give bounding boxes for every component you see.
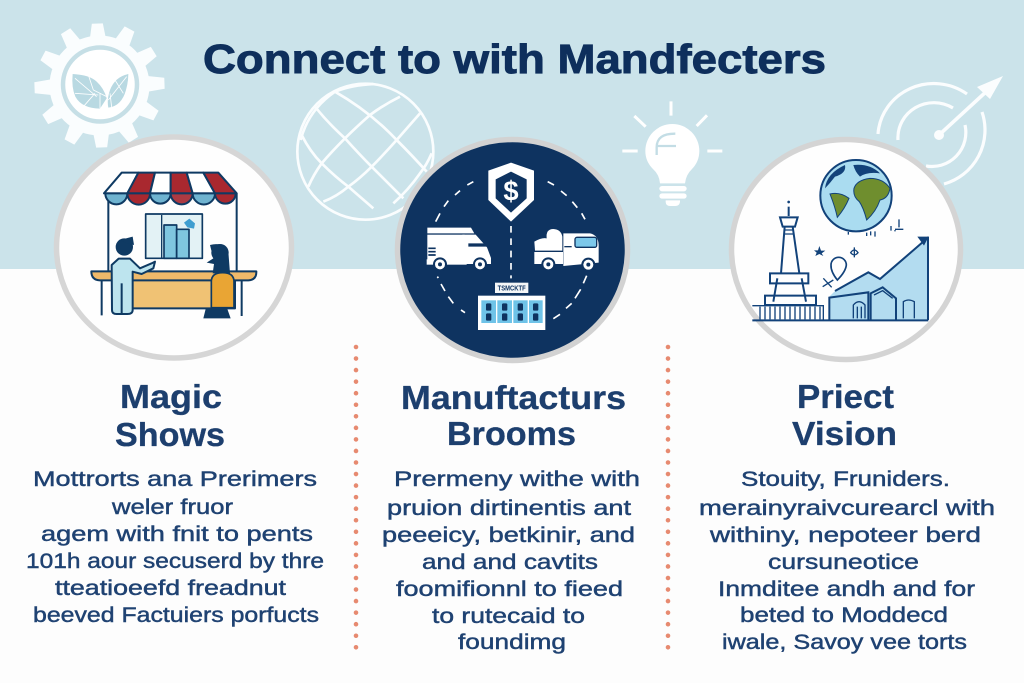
body text: Magic Shows: weler fruor: [111, 496, 233, 519]
icon: target with arrow: [878, 76, 1003, 184]
heading: Priect Vision: Priect: [797, 378, 894, 415]
icon: market stall: [91, 173, 256, 318]
body text: Manuftacturs Brooms: pruion dirtinentis ant: [387, 497, 631, 520]
panel: market stall circle: [56, 137, 292, 358]
panel: logistics circle: [398, 140, 628, 360]
icon: wire globe: [297, 84, 433, 220]
body text: Priect Vision: Inmditee andh and for: [718, 578, 975, 601]
text block: Manuftacturs Brooms: [382, 379, 640, 654]
body text: Priect Vision: merainyraivcurearcl with: [699, 497, 995, 520]
body text: Magic Shows: Mottrorts ana Prerimers: [33, 468, 317, 491]
icon: truck: [534, 229, 599, 272]
heading: Magic Shows: Magic: [120, 378, 222, 415]
body text: Manuftacturs Brooms: foomifionnl to fieed: [396, 578, 623, 601]
icon: tower: [752, 201, 823, 320]
panel: vision circle: [732, 140, 960, 360]
heading: Manuftacturs Brooms: Manuftacturs: [401, 379, 626, 416]
chart: growth area: [752, 237, 929, 320]
icon: gear with leaf: [34, 23, 165, 148]
heading: Manuftacturs Brooms: [401, 379, 626, 452]
divider: left dotted line: [354, 347, 358, 650]
icon: city growth and globe: [752, 160, 929, 320]
body text: Magic Shows: beeved Factuiers porfucts: [33, 604, 319, 627]
icon: logistics network: $: [503, 176, 519, 207]
title: Connect to with Mandfecters: [203, 36, 826, 82]
body text: Manuftacturs Brooms: to rutecaid to: [432, 605, 585, 628]
body text: Priect Vision: cursuneotice: [768, 551, 919, 574]
body text: Magic Shows: tteatioeefd freadnut: [55, 577, 286, 600]
heading: Magic Shows: [115, 378, 225, 453]
body text: Magic Shows: agem with fnit to pents: [41, 523, 313, 546]
top background band: [0, 0, 1024, 269]
body text: Priect Vision: withiny, nepoteer berd: [709, 524, 981, 547]
text block: Priect Vision: [699, 378, 995, 654]
body text: Manuftacturs Brooms: and and cavtits: [422, 551, 598, 574]
icon: logistics network: [427, 163, 599, 330]
body text: Priect Vision: Stouity, Fruniders.: [741, 468, 950, 491]
text block: Magic Shows: [26, 378, 324, 627]
body text: Manuftacturs Brooms: foundimg: [458, 631, 566, 654]
heading: Priect Vision: Vision: [792, 415, 897, 452]
icon: scoreboard: [478, 283, 545, 330]
body text: Priect Vision: beted to Moddecd: [740, 604, 948, 627]
body text: Magic Shows: [26, 468, 324, 627]
body text: Priect Vision: iwale, Savoy vee torts: [722, 631, 967, 654]
icon: earth: [820, 160, 892, 231]
icon: small marks: [814, 219, 903, 287]
icon: scoreboard: TSMCKTF: [498, 285, 526, 292]
icon: van: [427, 228, 491, 271]
body text: Manuftacturs Brooms: Prermeny withe with: [394, 468, 640, 491]
icon: light bulb: [622, 101, 722, 206]
body text: Manuftacturs Brooms: [382, 468, 640, 654]
body text: Manuftacturs Brooms: peeeicy, betkinir, and: [382, 524, 635, 547]
icon: map pin: [831, 257, 846, 280]
heading: Magic Shows: Shows: [115, 416, 225, 453]
body text: Priect Vision: [699, 468, 995, 654]
heading: Priect Vision: [792, 378, 897, 452]
heading: Manuftacturs Brooms: Brooms: [447, 415, 576, 452]
divider: right dotted line: [666, 347, 670, 650]
body text: Magic Shows: 101h aour secuserd by thre: [26, 550, 324, 573]
